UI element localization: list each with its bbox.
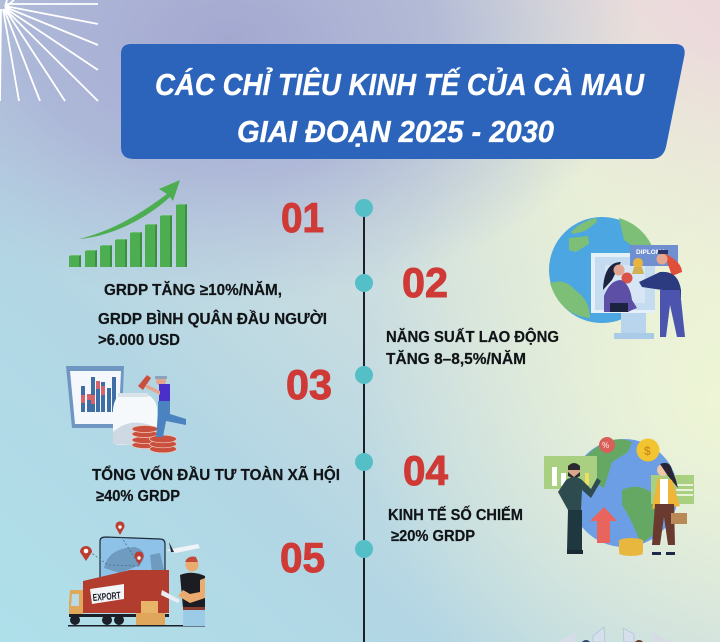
text block 01: GRDP TĂNG ≥10%/NĂM, <box>104 282 282 299</box>
timeline <box>355 199 373 642</box>
text block 03: TỔNG VỐN ĐẦU TƯ TOÀN XÃ HỘI <box>92 466 340 484</box>
icon: export truck, world map, plane and worker: EXPORT <box>92 591 121 604</box>
icon: digital economy globe with two business people: % <box>602 441 609 450</box>
text block 02 <box>386 328 559 368</box>
title line 1: CÁC CHỈ TIÊU KINH TẾ CỦA CÀ MAU <box>155 66 645 102</box>
text block 04: ≥20% GRDP <box>391 528 475 545</box>
title line 2: GIAI ĐOẠN 2025 - 2030 <box>237 115 554 149</box>
icon: partially visible people and report cards at bottom edge <box>557 627 669 642</box>
title banner <box>121 44 685 159</box>
number 05: 05 <box>280 534 325 581</box>
icon: globe, diploma and two people: DIPLOMA <box>636 249 666 256</box>
icon: export truck, world map, plane and worker <box>68 521 205 626</box>
number 04: 04 <box>403 447 449 494</box>
text block 03: ≥40% GRDP <box>96 488 180 505</box>
text block 03 <box>92 466 340 505</box>
text block 01: >6.000 USD <box>98 332 180 349</box>
text block 04: KINH TẾ SỐ CHIẾM <box>388 506 523 524</box>
text block 02: NĂNG SUẤT LAO ĐỘNG <box>386 328 559 346</box>
timeline dot 02 <box>355 274 373 292</box>
text block 02: TĂNG 8–8,5%/NĂM <box>386 351 526 368</box>
number 02: 02 <box>402 259 448 306</box>
decorative sunburst <box>0 0 98 101</box>
icon: investment chart, jar of money and person with coin <box>66 366 186 453</box>
icon: digital economy globe with two business people <box>544 437 694 556</box>
timeline dot 05 <box>355 540 373 558</box>
timeline dot 03 <box>355 366 373 384</box>
icon: digital economy globe with two business people: $ <box>644 444 651 458</box>
text block 01: GRDP BÌNH QUÂN ĐẦU NGƯỜI <box>98 310 327 328</box>
timeline dot 04 <box>355 453 373 471</box>
number 03: 03 <box>286 361 332 408</box>
timeline dot 01 <box>355 199 373 217</box>
number 01: 01 <box>281 194 324 241</box>
text block 04 <box>388 506 523 545</box>
icon: globe, diploma and two people <box>549 217 685 339</box>
text block 01 <box>98 282 327 349</box>
icon: growth bar chart with arrow <box>69 180 187 267</box>
